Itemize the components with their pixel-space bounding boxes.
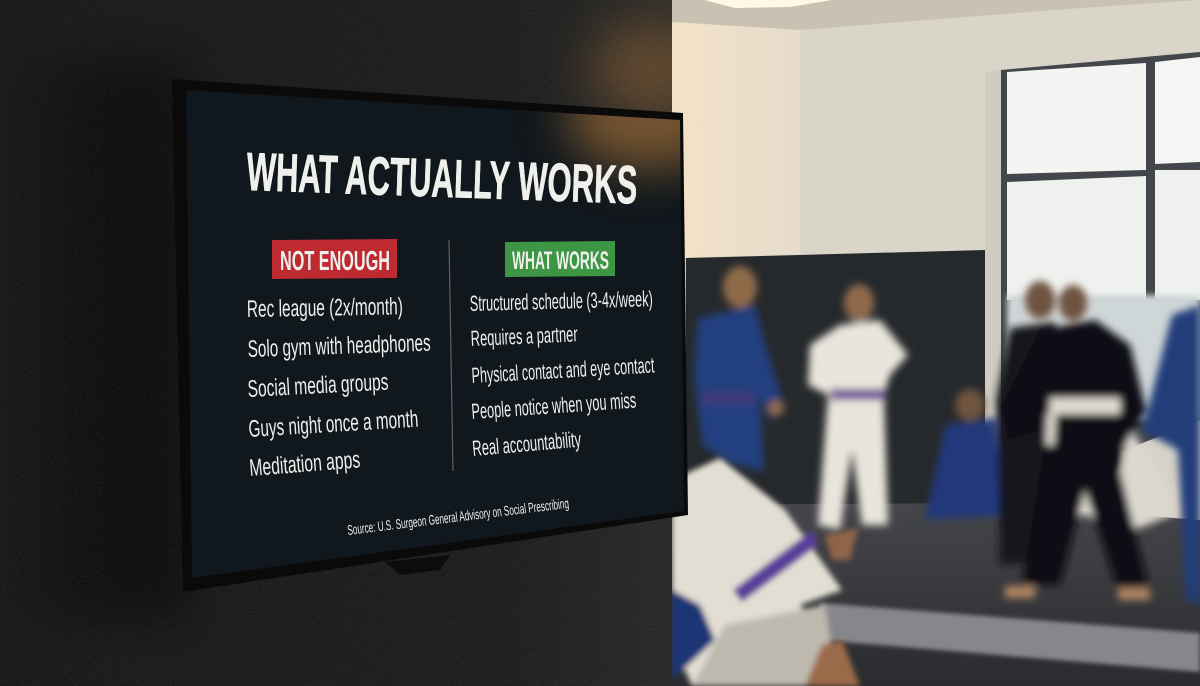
list: what works: Real accountability [471, 427, 582, 461]
column: not enough [247, 239, 431, 482]
list: what works: Physical contact and eye contact [471, 352, 655, 388]
screen [186, 90, 684, 578]
list: not enough: Guys night once a month [248, 406, 419, 443]
dark textured wall [0, 0, 710, 686]
floor [672, 503, 1200, 686]
list: what works: Requires a partner [470, 321, 578, 351]
badge: not enough: NOT ENOUGH [280, 245, 390, 276]
window [985, 52, 1200, 503]
person: blue gi standing left [694, 266, 785, 472]
source note: Source: U.S. Surgeon General Advisory on Social Prescribing [346, 495, 570, 538]
badge: what works: WHAT WORKS [512, 247, 609, 275]
list: what works: Structured schedule (3-4x/week) [469, 286, 653, 316]
list: not enough: Social media groups [247, 369, 389, 403]
TV monitor [172, 79, 688, 592]
title: WHAT ACTUALLY WORKS [246, 142, 638, 216]
person: foreground white gi [672, 458, 860, 686]
badge: not enough [272, 239, 397, 279]
column divider [449, 240, 453, 471]
column: what works [469, 241, 655, 461]
person: black gi standing back [996, 281, 1060, 565]
badge: what works [505, 241, 615, 277]
list: not enough: Rec league (2x/month) [247, 293, 403, 323]
person: blue gi right edge [1142, 305, 1200, 605]
list: what works [469, 286, 655, 461]
person: black gi centre [1002, 285, 1150, 600]
people [694, 266, 1200, 605]
person: kneeling blue [925, 389, 1003, 520]
list: not enough [247, 293, 431, 482]
gym room background [672, 0, 1200, 686]
list: what works: People notice when you miss [471, 388, 637, 424]
dark wall padding [686, 250, 985, 505]
list: not enough: Solo gym with headphones [247, 330, 431, 363]
mount shadow [385, 555, 450, 575]
person: seated white back [1068, 420, 1172, 528]
list: not enough: Meditation apps [248, 446, 361, 482]
person: white gi standing centre [808, 284, 908, 530]
